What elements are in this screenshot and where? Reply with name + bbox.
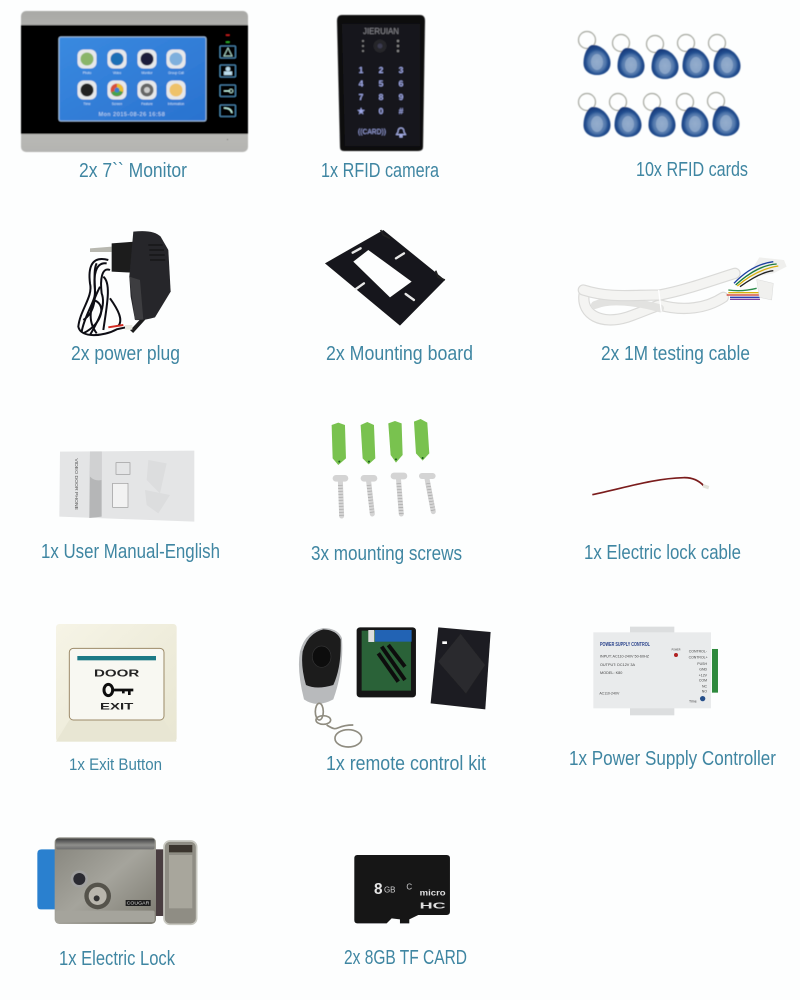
icon: RFID key fobs (578, 32, 740, 137)
caption: 2x power plug (71, 343, 180, 365)
icon: monitor: Mon 2015-08-26 16:58 (99, 112, 165, 118)
icon: monitor: Video (113, 71, 121, 75)
icon: RFID keypad camera: 3 (399, 65, 404, 75)
icon: manual booklet: VIDEO DOOR PHONE (74, 458, 79, 510)
icon: RFID keypad camera: 5 (379, 78, 384, 88)
icon: RFID keypad camera: 2 (379, 65, 384, 75)
icon: RFID keypad camera: 8 (379, 92, 384, 102)
icon: monitor: Feature (141, 102, 153, 106)
icon: RFID keypad camera (337, 15, 425, 151)
icon: power supply box: Time (689, 699, 697, 703)
item: mounting screws (311, 419, 462, 565)
caption: 1x Electric lock cable (584, 542, 741, 564)
icon: RFID keypad camera: JIERUIAN (363, 27, 399, 36)
icon: red-black cable (592, 478, 709, 495)
icon: RFID keypad camera: 6 (399, 78, 404, 88)
caption: 2x 7`` Monitor (79, 160, 187, 182)
item: RFID camera (321, 15, 440, 182)
item: user manual (41, 451, 220, 563)
icon: power supply box: CONTROL- (689, 650, 707, 654)
icon: RFID keypad camera: ((CARD)) (358, 129, 386, 136)
icon: electric door lock (37, 837, 197, 924)
icon: power supply box: PUSH (697, 662, 707, 666)
icon: power supply box: AC110-240V (599, 691, 620, 695)
icon: power adapter (78, 231, 171, 335)
caption: 1x Electric Lock (59, 948, 176, 970)
icon: micro SD card: C (406, 882, 412, 891)
item: electric lock cable (584, 478, 741, 564)
item: TF card (344, 855, 467, 969)
icon: power supply box: GND (699, 668, 707, 672)
icon: RFID keypad camera: 0 (379, 106, 384, 116)
icon: power supply box: COM (699, 679, 707, 683)
caption: 2x 8GB TF CARD (344, 947, 467, 969)
caption: 10x RFID cards (636, 159, 748, 181)
icon: power supply box: +12V (699, 674, 708, 678)
icon: power supply box: NC (702, 685, 707, 689)
item: power plug (71, 231, 180, 365)
icon: power supply box (593, 627, 718, 715)
icon: manual booklet (59, 451, 194, 522)
icon: RFID keypad camera: 9 (399, 92, 404, 102)
icon: RFID keypad camera: ★ (357, 106, 366, 116)
item: RFID cards (578, 32, 748, 181)
icon: power supply box: OUTPUT: DC12V 3A (600, 663, 636, 667)
icon: RFID keypad camera: 1 (359, 65, 364, 75)
caption: 2x 1M testing cable (601, 343, 750, 365)
icon: power supply box: MODEL: K80 (600, 671, 622, 675)
caption: 1x Exit Button (69, 755, 162, 774)
icon: electric door lock: COUGAR (127, 901, 149, 906)
icon: door exit button (56, 624, 177, 742)
icon: monitor: Photo (83, 71, 91, 75)
icon: monitor (21, 11, 248, 152)
caption: 1x remote control kit (326, 753, 486, 775)
icon: micro SD card: micro (420, 887, 446, 897)
item: mounting board (325, 230, 473, 365)
icon: micro SD card: GB (384, 886, 396, 895)
item: testing cable (583, 257, 787, 365)
icon: micro SD card (354, 855, 450, 923)
icon: micro SD card: 8 (374, 881, 383, 898)
icon: monitor: Group Call (168, 71, 184, 75)
icon: micro SD card: HC (420, 901, 447, 911)
icon: power supply box: NO (702, 690, 707, 694)
caption: 3x mounting screws (311, 543, 462, 565)
caption: 2x Mounting board (326, 343, 473, 365)
icon: white cable (583, 257, 787, 320)
icon: monitor: Screen (112, 102, 122, 106)
icon: RFID keypad camera: 7 (359, 92, 364, 102)
icon: monitor: Information (168, 102, 184, 106)
icon: monitor: Monitor (142, 71, 153, 75)
icon: monitor: Time (83, 102, 91, 106)
caption: 1x User Manual-English (41, 541, 220, 563)
item: electric lock (37, 837, 197, 970)
icon: mounting plate (325, 230, 445, 326)
icon: door exit button: DOOR (94, 668, 139, 679)
icon: green anchors and screws (332, 419, 433, 516)
icon: power supply box: POWER SUPPLY CONTROL (600, 642, 650, 648)
item: power supply controller (569, 627, 776, 770)
item: remote control kit (299, 627, 491, 775)
icon: RFID keypad camera: # (399, 106, 404, 116)
icon: power supply box: INPUT: AC110-240V 50-60HZ (600, 654, 650, 658)
icon: remote, receiver and case (299, 627, 491, 747)
item: exit button (56, 624, 177, 774)
icon: door exit button: EXIT (100, 701, 134, 711)
icon: power supply box: CONTROL+ (689, 655, 708, 659)
icon: RFID keypad camera: 4 (359, 78, 364, 88)
caption: 1x RFID camera (321, 160, 440, 182)
item: 7 inch monitor (21, 11, 248, 182)
icon: power supply box: POWER (672, 650, 681, 652)
